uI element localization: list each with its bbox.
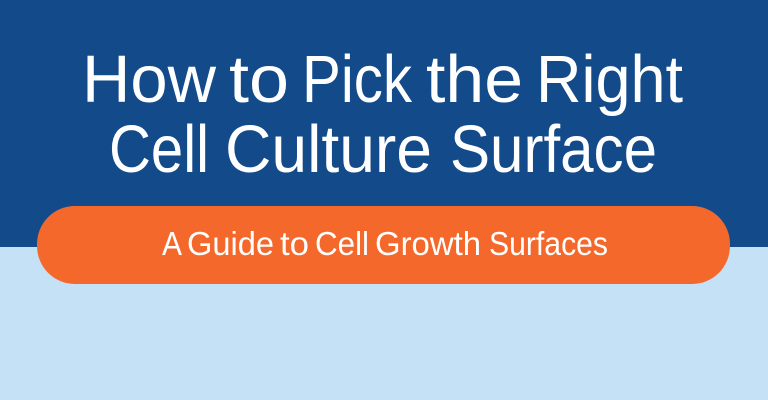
subtitle pill	[37, 206, 730, 284]
title: How	[82, 42, 217, 117]
subtitle text: Growth	[375, 225, 481, 262]
subtitle text: to	[280, 225, 309, 262]
title	[82, 42, 683, 187]
panel: blue header band	[0, 0, 768, 247]
subtitle text: Cell	[315, 225, 369, 262]
subtitle text: Surfaces	[489, 225, 608, 262]
title: the	[426, 42, 523, 117]
title: Right	[536, 42, 683, 117]
panel: light blue lower background	[0, 247, 768, 400]
subtitle text: A	[162, 225, 182, 262]
subtitle text	[162, 225, 608, 262]
title: to	[229, 42, 289, 117]
subtitle text: Guide	[187, 225, 274, 262]
title: Pick	[302, 42, 412, 117]
title: Culture	[225, 112, 432, 187]
title: Surface	[450, 112, 657, 187]
title: Cell	[109, 112, 209, 187]
